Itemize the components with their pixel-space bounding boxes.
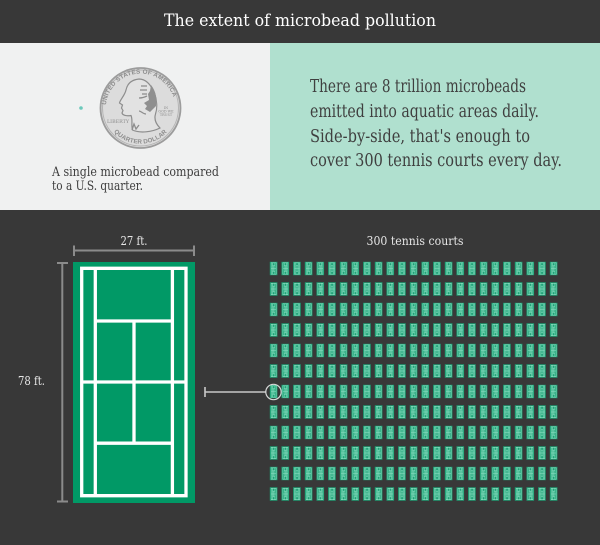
grid of 300 tennis courts [270,262,557,501]
icon: U.S. quarter: LIBERTY [107,119,130,125]
width dimension: 27 ft.: 27 ft. [120,233,148,248]
callout: leader line to one court [205,384,281,400]
statement text: Side-by-side, that's enough to [310,127,530,147]
label: 300 tennis courts: 300 tennis courts [366,233,464,248]
statement text: There are 8 trillion microbeads [310,77,526,97]
caption: to a U.S. quarter. [52,179,143,194]
height dimension: 78 ft. [18,263,68,502]
height dimension: 78 ft.: 78 ft. [18,373,45,388]
icon: U.S. quarter [100,67,182,149]
icon: U.S. quarter: UNITED STATES OF AMERICA [102,69,177,104]
panel: quarter comparison [0,43,270,210]
icon: U.S. quarter: GOD WE [158,110,174,114]
title: The extent of microbead pollution [164,11,436,31]
statement text [310,77,562,171]
statement text: emitted into aquatic areas daily. [310,102,539,122]
icon: U.S. quarter: QUARTER DOLLAR [114,130,167,144]
panel: microbead statement [270,43,600,210]
caption [51,165,219,194]
tennis court diagram [73,262,195,503]
caption: A single microbead compared [51,165,219,180]
icon: U.S. quarter: IN [164,106,168,110]
icon: U.S. quarter: TRUST [160,113,173,117]
icon: microbead dot [79,106,83,110]
width dimension: 27 ft. [74,233,194,256]
